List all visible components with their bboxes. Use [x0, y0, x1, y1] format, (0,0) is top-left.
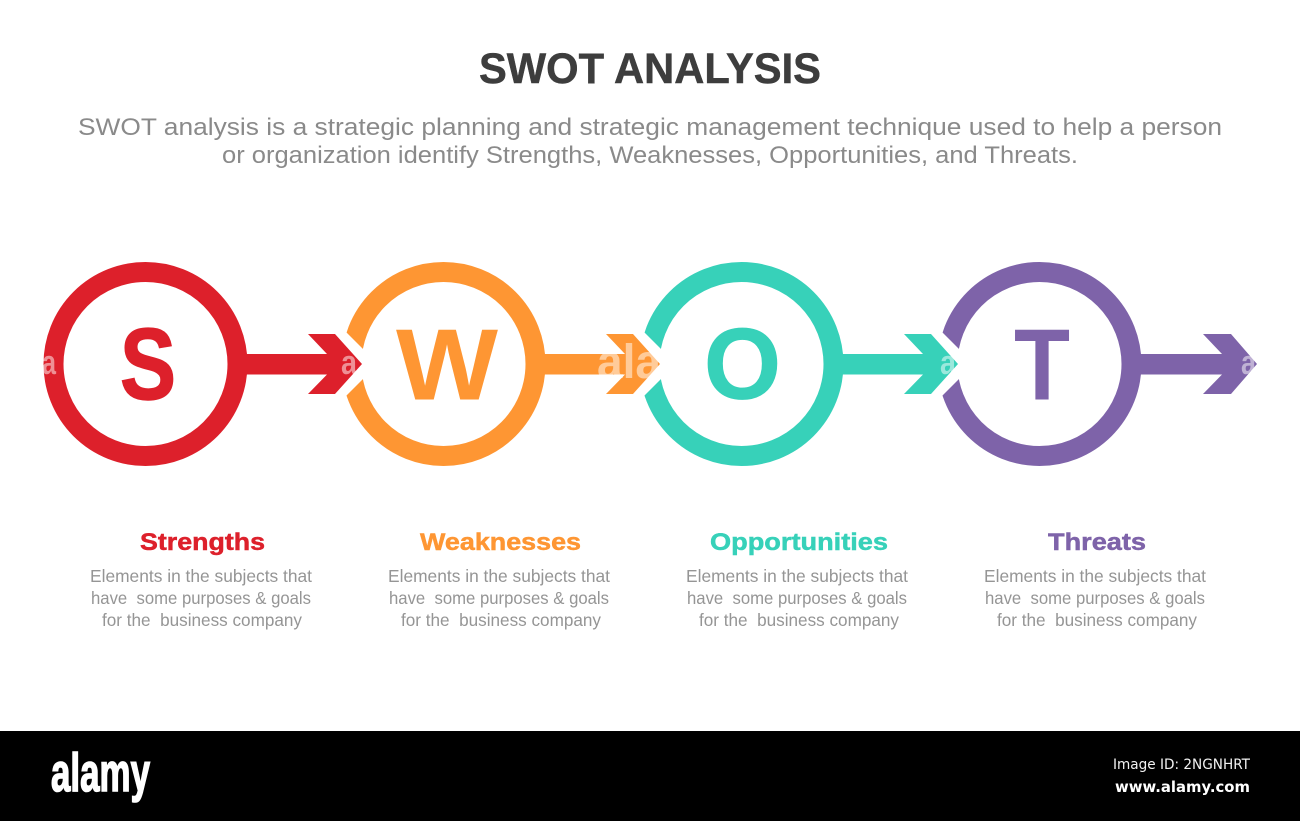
step T: circle — [948, 272, 1132, 456]
watermark fragments — [42, 336, 1257, 389]
arrow: W to O — [543, 326, 676, 402]
title: SWOT ANALYSIS — [479, 45, 821, 93]
subtitle text block — [78, 114, 1222, 169]
description: have some purposes & goals — [389, 588, 609, 608]
column: Weaknesses — [388, 529, 610, 630]
description: Elements in the subjects that — [90, 566, 312, 586]
description: have some purposes & goals — [687, 588, 907, 608]
description: have some purposes & goals — [985, 588, 1205, 608]
heading: Weaknesses — [420, 529, 581, 556]
description: have some purposes & goals — [91, 588, 311, 608]
heading: Strengths — [140, 529, 265, 556]
description: for the business company — [401, 610, 601, 630]
description — [984, 566, 1206, 630]
description — [90, 566, 312, 630]
website: www.alamy.com — [1115, 778, 1250, 796]
image id: Image ID: 2NGNHRT — [1113, 757, 1250, 773]
step W: circle — [352, 272, 536, 456]
description: for the business company — [997, 610, 1197, 630]
description: Elements in the subjects that — [984, 566, 1206, 586]
description: for the business company — [699, 610, 899, 630]
alamy logo: alamy — [51, 743, 150, 803]
circle W — [352, 272, 536, 456]
watermark fragments: ala — [597, 336, 661, 389]
letter O: O — [704, 308, 781, 420]
description: Elements in the subjects that — [388, 566, 610, 586]
letter T: T — [1014, 310, 1070, 422]
circle O — [650, 272, 834, 456]
watermark fragments: a — [42, 344, 57, 382]
arrow: S to W — [245, 326, 378, 402]
step O: circle — [650, 272, 834, 456]
circle S — [54, 272, 238, 456]
column: Opportunities — [686, 529, 908, 630]
letter S: S — [120, 309, 176, 421]
description: for the business company — [102, 610, 302, 630]
description: Elements in the subjects that — [686, 566, 908, 586]
column: Strengths — [90, 529, 312, 630]
arrow: T outward — [1137, 334, 1257, 394]
circle T — [948, 272, 1132, 456]
letter W: W — [396, 310, 499, 422]
heading: Opportunities — [710, 529, 888, 556]
subtitle text block: or organization identify Strengths, Weaknesses, Opportunities, and Threats. — [222, 142, 1078, 169]
step S: circle and arrow — [54, 272, 238, 456]
arrow: O to T — [841, 326, 974, 402]
description — [686, 566, 908, 630]
subtitle text block: SWOT analysis is a strategic planning and strategic management technique used to help a person — [78, 114, 1222, 141]
column: Threats — [984, 529, 1206, 630]
description — [388, 566, 610, 630]
watermark fragments: a — [341, 344, 358, 382]
watermark fragments: a — [1241, 344, 1257, 382]
watermark fragments: a — [940, 344, 957, 382]
footer band — [0, 731, 1300, 821]
heading: Threats — [1048, 529, 1146, 556]
